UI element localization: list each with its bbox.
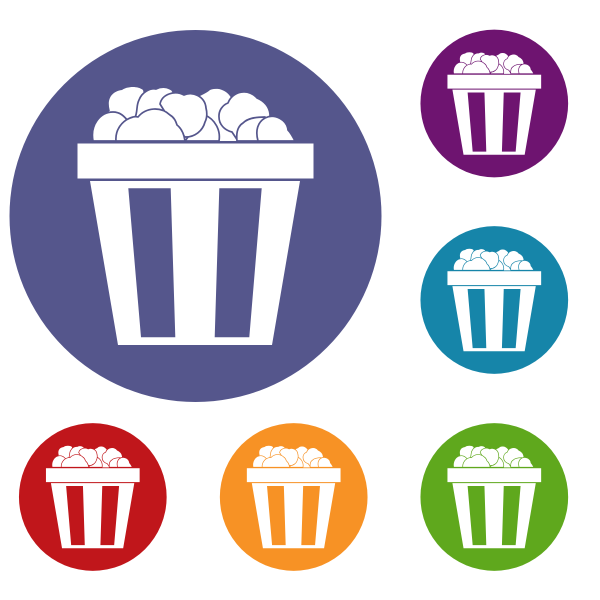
icon: large indigo popcorn bucket (10, 30, 382, 402)
icon: red popcorn bucket (19, 423, 167, 571)
icon: green popcorn bucket (420, 423, 568, 571)
icon: orange popcorn bucket (220, 423, 368, 571)
icon: teal popcorn bucket (420, 226, 568, 374)
icon: purple popcorn bucket (420, 30, 568, 177)
